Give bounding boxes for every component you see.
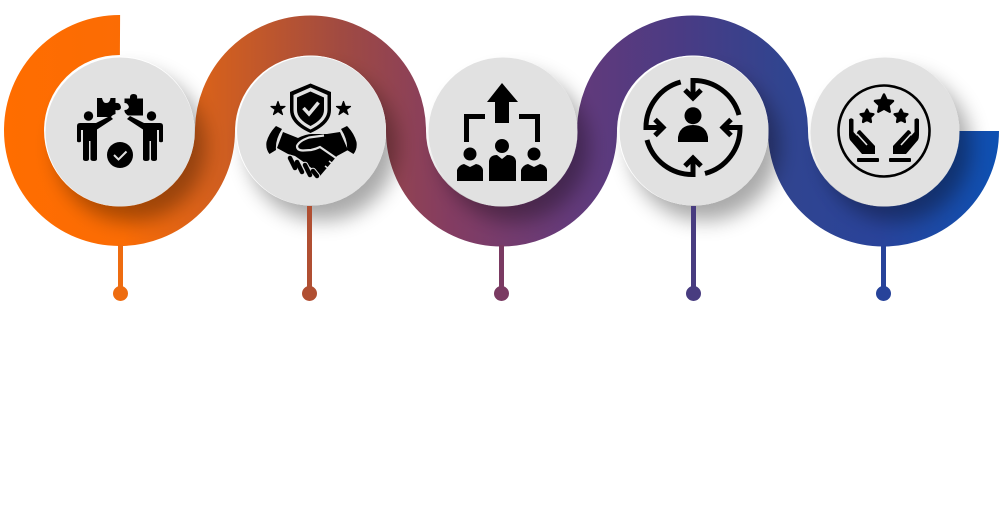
circle 2 [236,56,386,206]
connector 4 [686,206,701,301]
connector 5 [876,245,891,301]
connector 2 [302,206,317,301]
circle 3 [428,58,578,206]
icon: teamwork puzzle [77,94,163,168]
circle 5 [810,58,960,206]
connector 3 [494,245,509,301]
icon: people and upward arrow [457,83,547,181]
icon: hands holding stars [838,86,930,176]
circle 4 [618,56,768,206]
icon: person with circular arrows [646,80,740,175]
icon: trust handshake [266,84,357,176]
ribbon [24,35,979,226]
connector 1 [113,245,128,301]
circle 1 [44,56,194,206]
